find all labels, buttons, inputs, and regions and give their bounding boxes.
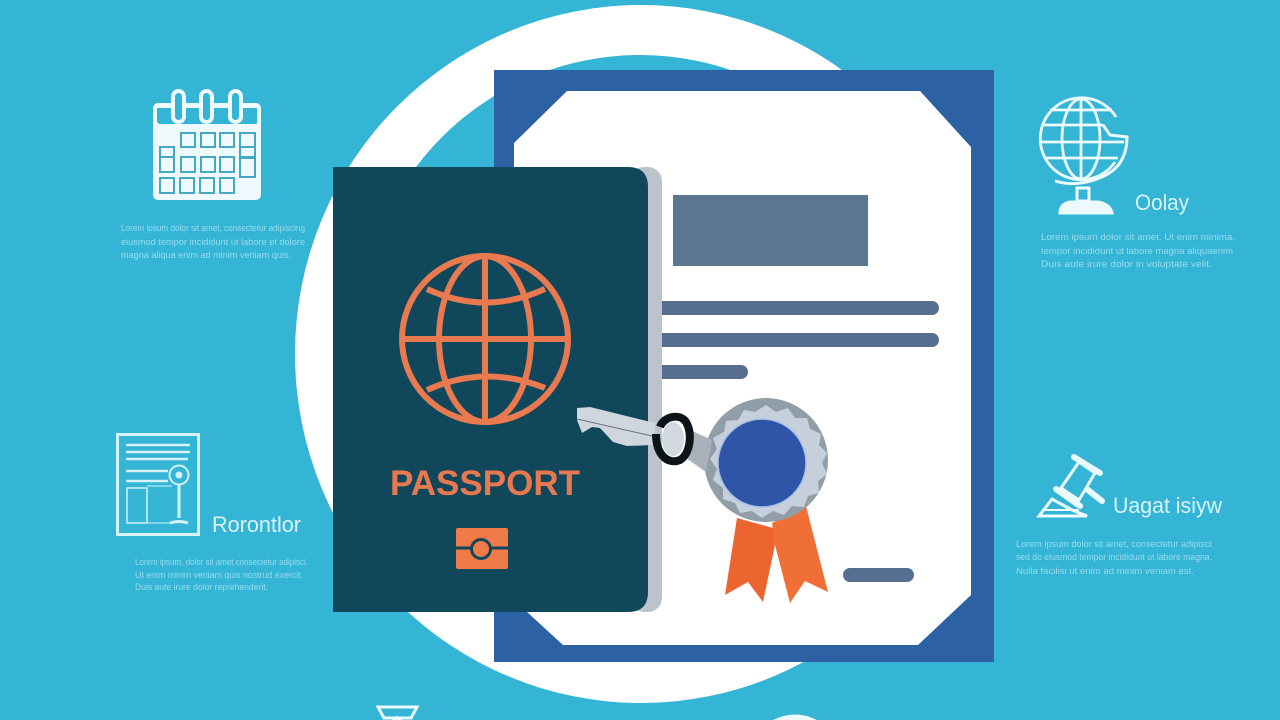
icon: key connector (686, 430, 712, 472)
icon: desk globe (1040, 98, 1127, 213)
text block: calendar description: Lorem ipsum dolor sit amet, consectetur adipiscing (121, 223, 305, 234)
text block: globe description (1041, 232, 1235, 270)
icon: passport globe (402, 256, 568, 422)
icon: bottom right cropped (773, 714, 817, 720)
label: globe: Oolay (1135, 190, 1189, 215)
icon: biometric chip (456, 528, 508, 569)
icon: document with stamp (118, 434, 198, 534)
panel: certificate document (494, 70, 994, 662)
text block: legal description: Nulla facilisi ut enim ad minim veniam est. (1016, 566, 1194, 577)
panel: passport (333, 167, 662, 612)
certificate photo block (673, 195, 868, 266)
text block: document description: Lorem ipsum, dolor sit amet consectetur adipisci. (135, 557, 308, 568)
text block: globe description: Duis aute irure dolor in voluptate velit. (1041, 259, 1212, 270)
label: document: Rorontlor (212, 512, 301, 537)
icon: key (577, 407, 690, 461)
icon: calendar (153, 91, 261, 200)
text block: document description (135, 557, 308, 593)
text block: document description: Duis aute irure dolor reprehenderit. (135, 582, 268, 593)
icon: ribbon seal (704, 398, 828, 603)
text block: calendar description: eiusmod tempor incididunt ut labore et dolore (121, 237, 305, 248)
text block: calendar description (121, 223, 305, 261)
certificate text lines (655, 301, 939, 379)
text block: legal description: Lorem ipsum dolor sit amet, consectetur adipisci. (1016, 539, 1214, 550)
text block: globe description: Lorem ipsum dolor sit amet. Ut enim minima. (1041, 232, 1235, 243)
signature line (843, 568, 914, 582)
text block: globe description: tempor incididunt ut labore magna aliquaenim (1041, 246, 1233, 257)
text block: document description: Ut enim minim veniam quis nostrud exercit. (135, 570, 303, 581)
text block: legal description (1016, 539, 1214, 577)
passport title: PASSPORT (390, 464, 580, 503)
text block: legal description: sed do eiusmod tempor incididunt ut labore magna. (1016, 552, 1212, 563)
white ring background (295, 5, 987, 703)
icon: bottom left cropped (378, 707, 417, 720)
icon: gavel (1039, 457, 1102, 516)
text block: calendar description: magna aliqua enim ad minim veniam quis. (121, 250, 291, 261)
label: legal: Uagat isiyw (1113, 493, 1222, 518)
